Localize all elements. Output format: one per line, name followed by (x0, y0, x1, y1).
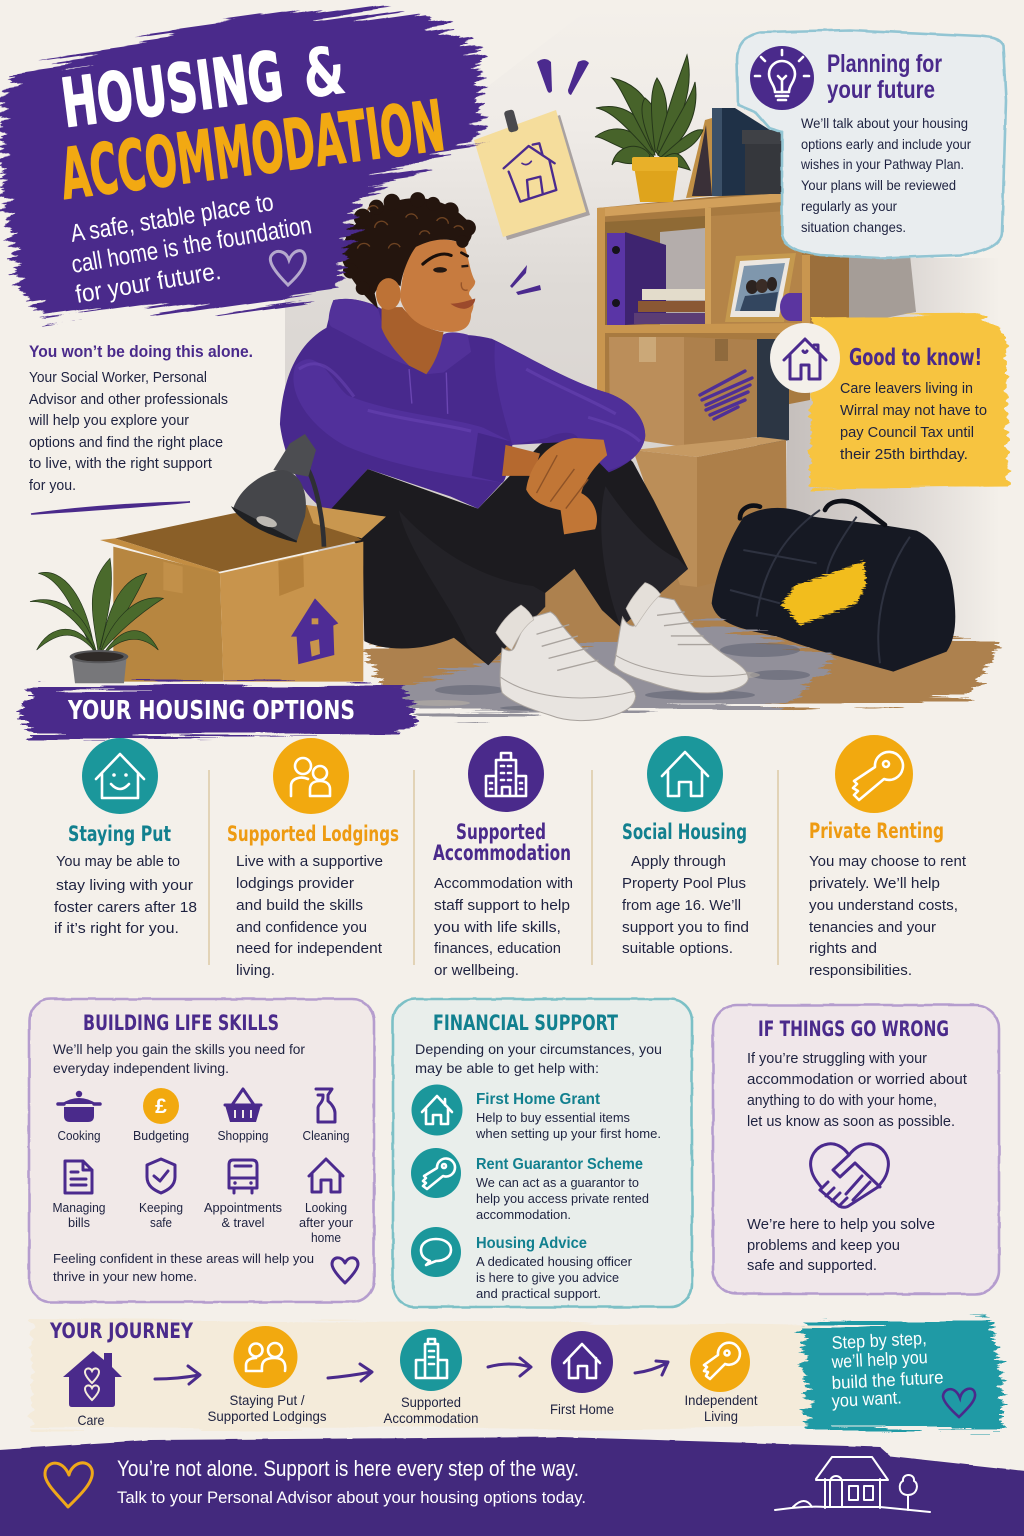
callout: step by step: you want. (831, 1387, 902, 1411)
staying put text: stay living with your (56, 877, 193, 894)
front trainer (500, 612, 636, 721)
wrong closing text: safe and supported. (747, 1257, 877, 1274)
skill: looking after your home: after your (299, 1216, 353, 1230)
stacked books (634, 289, 705, 324)
box interior and far flap (115, 505, 386, 572)
skill: cooking (58, 1091, 101, 1143)
socks (496, 583, 660, 650)
supported accommodation text (433, 820, 573, 979)
item: housing advice: Housing Advice (476, 1235, 587, 1252)
footer message: Talk to your Personal Advisor about your housing options today. (117, 1488, 586, 1507)
facial features (423, 253, 475, 309)
life skills intro: everyday independent living. (53, 1060, 229, 1076)
good to know body: Wirral may not have to (840, 402, 987, 419)
planning body: We’ll talk about your housing (801, 115, 968, 131)
item: housing advice (411, 1227, 633, 1301)
callout: step by step: Step by step, (831, 1328, 927, 1353)
grey pot (72, 657, 127, 683)
staying put text: foster carers after 18 (54, 899, 197, 916)
staying put text: You may be able to (56, 853, 180, 870)
title: housing and accommodation: & (298, 31, 350, 114)
desk lamp (233, 434, 324, 547)
option: staying put (54, 738, 197, 937)
icon: heart handshake (811, 1144, 888, 1207)
planning body: options early and include your (801, 136, 971, 152)
icon: heart (332, 1258, 358, 1283)
plant on shelf (595, 55, 703, 202)
private renting text: rights and (809, 940, 877, 957)
text block: you won't be doing this alone: You won’t be doing this alone. (29, 342, 253, 361)
step: care: Care (78, 1412, 105, 1428)
footer band (0, 1437, 1024, 1536)
planning body: regularly as your (801, 198, 897, 214)
good to know body: Care leavers living in (840, 380, 973, 397)
wrong intro: anything to do with your home, (747, 1092, 937, 1109)
face (400, 239, 475, 332)
icon: apartment building (468, 736, 544, 812)
purple underline stroke (31, 502, 190, 514)
hoodie (280, 299, 645, 510)
skill: budgeting: £ (155, 1095, 167, 1118)
financial heading: FINANCIAL SUPPORT (433, 1011, 619, 1035)
rug (385, 623, 838, 714)
financial intro (415, 1041, 662, 1076)
skill: keeping safe (139, 1159, 183, 1230)
step: supported accommodation: Supported (401, 1394, 461, 1410)
journey heading: YOUR JOURNEY (49, 1319, 194, 1343)
item: rent guarantor scheme: accommodation. (476, 1207, 571, 1222)
supported lodgings text: and confidence you (236, 919, 367, 936)
step: first home: First Home (550, 1401, 614, 1417)
text block: you won't be doing this alone: Your Social Worker, Personal (29, 369, 207, 386)
wrong intro: If you’re struggling with your (747, 1050, 927, 1067)
mug on shelf (780, 293, 802, 321)
illustration: room scene (30, 0, 1000, 721)
panel: planning for your future (737, 30, 1006, 258)
title: housing and accommodation: ACCOMMODATION (56, 85, 449, 216)
books on top (686, 108, 782, 198)
text block: you won't be doing this alone: for you. (29, 477, 76, 494)
text block: you won't be doing this alone: to live, with the right support (29, 455, 213, 472)
staying put text: Staying Put (68, 822, 171, 846)
item: housing advice: A dedicated housing officer (476, 1254, 633, 1269)
step: independent living: Independent (684, 1392, 758, 1408)
social housing text: from age 16. We’ll (622, 897, 741, 914)
title: housing and accommodation (56, 31, 449, 216)
footer message: You’re not alone. Support is here every step of the way. (117, 1456, 579, 1481)
icon: subtitle heart (270, 251, 305, 285)
floor (364, 545, 1000, 708)
life skills footer: Feeling confident in these areas will help you (53, 1251, 314, 1266)
option dividers (209, 770, 778, 965)
staying put text (54, 822, 197, 937)
icon: two people (273, 738, 349, 814)
panel: building life skills (29, 999, 374, 1302)
potted plant on floor (30, 558, 163, 683)
yellow note pinned to wall (474, 109, 590, 240)
icon: house (647, 736, 723, 812)
skill: budgeting: Budgeting (133, 1129, 189, 1143)
skill: looking after your home: home (311, 1231, 341, 1245)
supported accommodation text: Accommodation with (434, 875, 573, 892)
planning body: wishes in your Pathway Plan. (800, 156, 964, 172)
title brush stroke (0, 0, 522, 386)
social housing text: Social Housing (622, 820, 747, 844)
planning body: situation changes. (801, 219, 906, 235)
icon: lightbulb (750, 46, 814, 110)
step: first home (550, 1331, 614, 1417)
title: housing and accommodation: HOUSING (57, 37, 287, 143)
back trainer (614, 596, 748, 693)
text block: you won't be doing this alone: Advisor and other professionals (29, 391, 228, 408)
private renting text: privately. We’ll help (809, 875, 940, 892)
supported accommodation text: Accommodation (433, 841, 571, 865)
wrong heading: IF THINGS GO WRONG (758, 1017, 949, 1041)
step: care (63, 1351, 122, 1428)
banner: your housing options (20, 685, 415, 738)
planning body (800, 115, 971, 235)
wrong closing text (747, 1216, 935, 1274)
yellow scribble on bag (782, 562, 867, 625)
wrong intro: accommodation or worried about (747, 1071, 968, 1088)
staying put text: if it’s right for you. (54, 920, 179, 937)
panel: good to know (770, 314, 1008, 488)
item: housing advice: and practical support. (476, 1286, 601, 1301)
planning body: Your plans will be reviewed (801, 177, 956, 193)
item: first home grant: Help to buy essential items (476, 1110, 630, 1125)
skill: appointments and travel (204, 1160, 282, 1230)
supported accommodation text: Supported (456, 820, 546, 844)
good to know body: their 25th birthday. (840, 446, 968, 463)
supported lodgings text: and build the skills (236, 897, 363, 914)
social housing text (622, 820, 749, 957)
planning heading (827, 50, 942, 104)
social housing text: Property Pool Plus (622, 875, 746, 892)
item: first home grant: when setting up your first home. (475, 1126, 661, 1141)
arrow: first home to independent (635, 1361, 668, 1375)
item: rent guarantor scheme: Rent Guarantor Scheme (476, 1156, 643, 1173)
icon: house in white circle (770, 323, 840, 393)
skill: cooking: Cooking (58, 1129, 101, 1143)
arrow: lodgings to accommodation (328, 1364, 372, 1381)
icon: amber heart (45, 1463, 92, 1507)
private renting text: You may choose to rent (809, 853, 967, 870)
panel: financial support (393, 999, 692, 1307)
purple house mark (291, 598, 338, 664)
supported lodgings text: living. (236, 962, 275, 979)
item: rent guarantor scheme (411, 1148, 649, 1222)
life skills heading: BUILDING LIFE SKILLS (83, 1011, 279, 1035)
private renting text: Private Renting (809, 819, 944, 843)
title subtitle: for your future. (73, 257, 223, 309)
wrong closing text: problems and keep you (747, 1237, 900, 1254)
financial intro: Depending on your circumstances, you (415, 1041, 662, 1057)
step: supported accommodation: Accommodation (384, 1410, 478, 1426)
item: first home grant (412, 1084, 661, 1141)
supported lodgings text: Live with a supportive (236, 853, 383, 870)
item: housing advice: is here to give you advice (476, 1270, 619, 1285)
life skills footer (53, 1251, 314, 1284)
wall shading (285, 0, 800, 640)
skill: managing bills: Managing (52, 1201, 106, 1215)
skill: keeping safe: safe (150, 1216, 172, 1230)
private renting text: you understand costs, (809, 897, 958, 914)
social housing text: suitable options. (622, 940, 733, 957)
arrow: accommodation to first home (488, 1358, 531, 1376)
text block: you won't be doing this alone: options and find the right place (29, 434, 223, 451)
skill: shopping (218, 1089, 269, 1143)
callout: step by step: build the future (831, 1367, 944, 1393)
icon: smiling house (82, 738, 158, 814)
supported lodgings text: Supported Lodgings (227, 822, 399, 846)
skill: shopping: Shopping (218, 1129, 269, 1143)
option: supported accommodation (433, 736, 573, 979)
band: your journey (32, 1318, 820, 1430)
planning heading: your future (827, 76, 935, 104)
supported lodgings text (227, 822, 399, 979)
item: rent guarantor scheme: We can act as a guarantor to (476, 1175, 639, 1190)
supported accommodation text: finances, education (434, 940, 561, 957)
financial intro: may be able to get help with: (415, 1060, 599, 1076)
supported accommodation text: or wellbeing. (434, 962, 519, 979)
icon: purple heart (943, 1389, 975, 1417)
forearm and hands (502, 438, 607, 534)
skill: cleaning: Cleaning (302, 1129, 350, 1143)
callout: step by step: we’ll help you (830, 1347, 928, 1372)
panel: if things go wrong (713, 1005, 999, 1294)
step: staying put or lodgings: Staying Put / (230, 1392, 305, 1408)
skill: appointments and travel: & travel (222, 1216, 264, 1230)
duffel bag (712, 501, 955, 672)
accent dashes (510, 59, 589, 295)
text block: you won't be doing this alone (28, 342, 253, 494)
title subtitle: A safe, stable place to (69, 188, 275, 248)
open cardboard box (100, 538, 363, 682)
planning heading: Planning for (827, 50, 942, 78)
good to know body (840, 380, 987, 463)
wrong closing text: We’re here to help you solve (747, 1216, 935, 1233)
step: independent living (684, 1332, 758, 1424)
supported lodgings text: need for independent (236, 940, 383, 957)
hair (339, 192, 476, 309)
life skills intro: We’ll help you gain the skills you need for (53, 1041, 305, 1057)
social housing text: Apply through (631, 853, 726, 870)
footer message (117, 1456, 586, 1507)
cardboard boxes stacked (609, 337, 789, 587)
framed photo (725, 253, 796, 322)
trousers (328, 421, 688, 665)
icon: key (835, 735, 913, 813)
skill: budgeting (133, 1088, 189, 1143)
skill: cleaning (302, 1089, 350, 1143)
wrong intro: let us know as soon as possible. (747, 1113, 955, 1130)
icon: note house (504, 143, 556, 202)
yellow pot (632, 158, 678, 202)
purple binder (607, 232, 666, 325)
wrong intro (747, 1050, 968, 1130)
right wall shadow (787, 258, 1000, 650)
skill: appointments and travel: Appointments (204, 1201, 282, 1215)
item: rent guarantor scheme: help you access private rented (476, 1191, 649, 1206)
supported accommodation text: you with life skills, (434, 919, 561, 936)
private renting text: responsibilities. (809, 962, 912, 979)
title subtitle: call home is the foundation (69, 211, 314, 279)
neck (382, 307, 444, 374)
step: supported accommodation (384, 1329, 478, 1426)
life skills footer: thrive in your new home. (53, 1269, 197, 1284)
supported lodgings text: lodgings provider (236, 875, 354, 892)
step: independent living: Living (704, 1408, 738, 1424)
good to know body: pay Council Tax until (840, 424, 974, 441)
step: staying put or lodgings: Supported Lodgings (208, 1408, 326, 1424)
purple scribble (700, 371, 752, 419)
private renting text (809, 819, 967, 979)
skill: looking after your home (299, 1159, 353, 1245)
teen sitting (280, 192, 748, 721)
private renting text: tenancies and your (809, 919, 936, 936)
skill: keeping safe: Keeping (139, 1201, 183, 1215)
skill: looking after your home: Looking (305, 1201, 347, 1215)
banner: your housing options: YOUR HOUSING OPTIONS (67, 696, 355, 726)
life skills intro (53, 1041, 305, 1076)
shadow behind shelf (849, 255, 916, 325)
supported accommodation text: staff support to help (434, 897, 570, 914)
option: social housing (622, 736, 749, 957)
text block: you won't be doing this alone: will help you explore your (28, 412, 189, 429)
step: staying put or lodgings (208, 1326, 326, 1424)
option: supported lodgings (227, 738, 399, 979)
arrow: care to lodgings (155, 1366, 200, 1384)
title subtitle (69, 188, 314, 309)
skill: managing bills (52, 1161, 106, 1230)
skill: managing bills: bills (68, 1216, 90, 1230)
callout: step by step (802, 1316, 1002, 1430)
social housing text: support you to find (622, 919, 749, 936)
option: private renting (809, 735, 967, 979)
item: first home grant: First Home Grant (476, 1091, 600, 1108)
ear (376, 278, 401, 310)
bookshelf (597, 108, 849, 440)
icon: sketched house (775, 1457, 930, 1512)
